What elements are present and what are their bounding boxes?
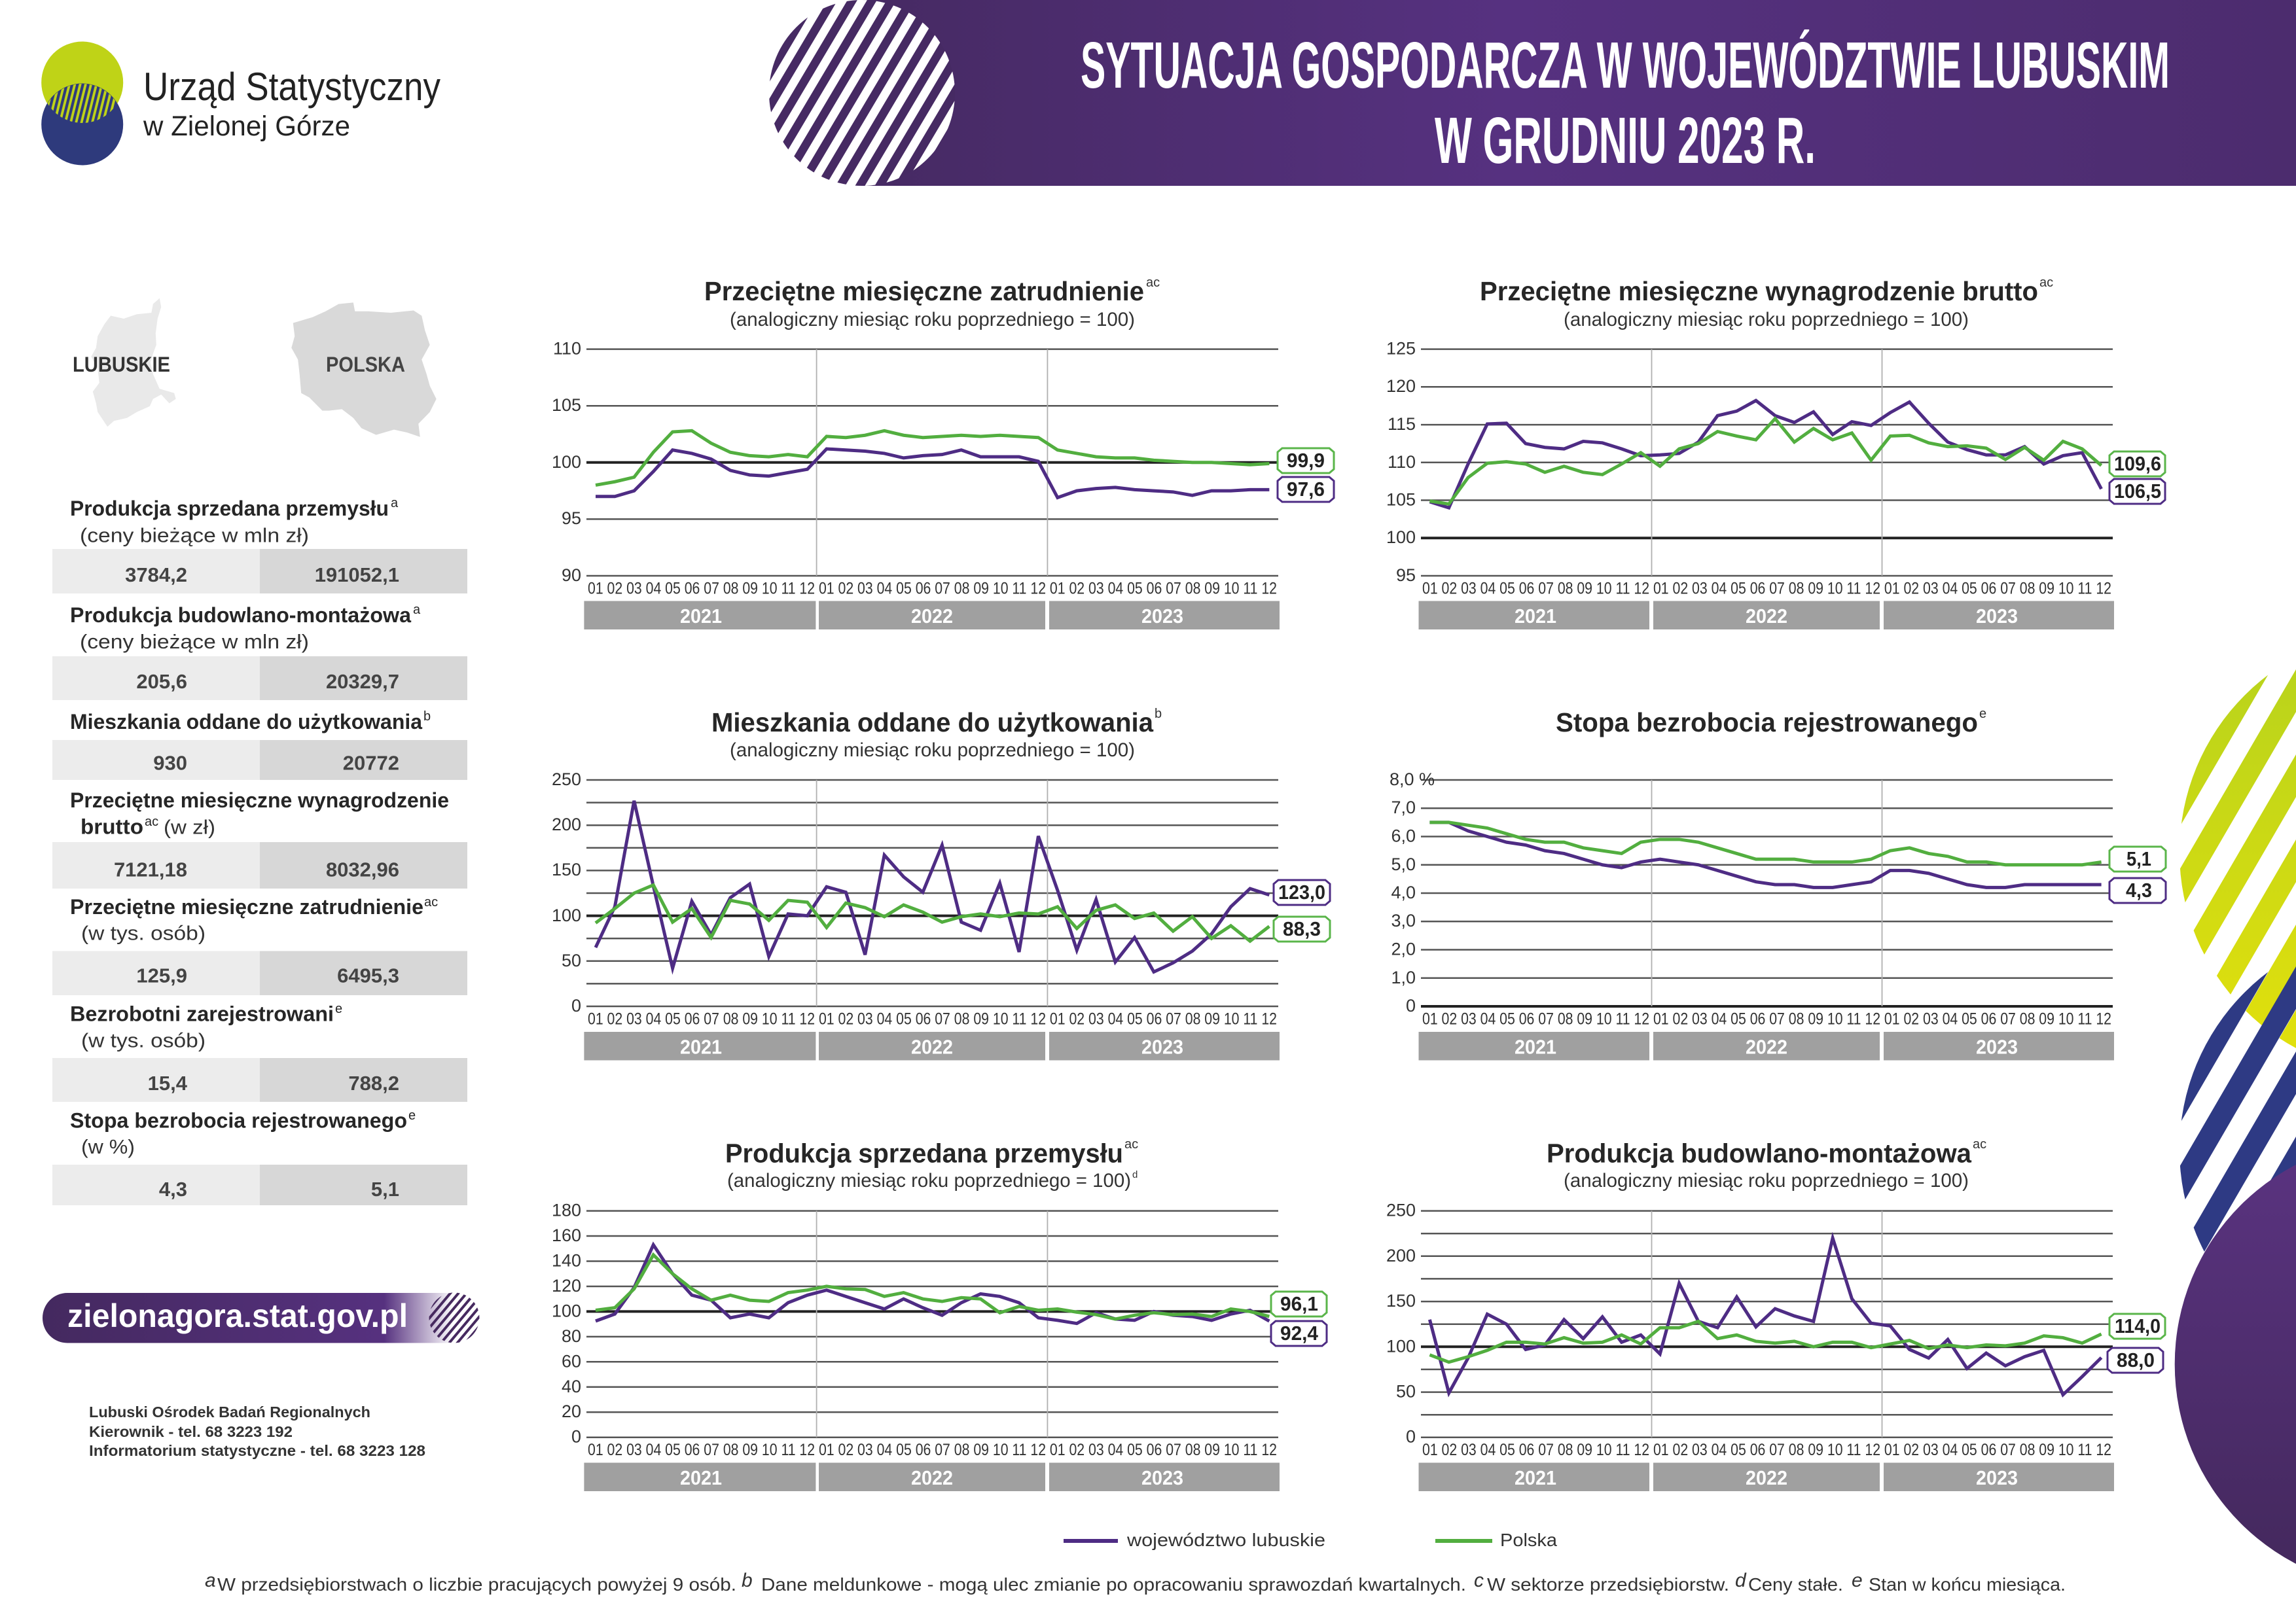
footnotes: Stan w końcu miesiąca. — [1869, 1574, 2066, 1595]
y axis labels: 150 — [552, 860, 581, 879]
year bars: 2022 — [1746, 1466, 1787, 1489]
value label: Polska 5,1: 5,1 — [2126, 847, 2151, 870]
row: produkcja budowlano-montażowa — [52, 603, 467, 700]
value label: Polska 5,1 — [2109, 847, 2166, 872]
panel: chart produkcja budowlano-montażowa — [1386, 1137, 2165, 1491]
banner background — [862, 0, 2296, 186]
footnotes: c — [1474, 1570, 1484, 1591]
y axis labels: 105 — [552, 395, 581, 415]
logo name: Urząd Statystyczny — [143, 65, 440, 109]
chart subtitle: (analogiczny miesiąc roku poprzedniego = 100) — [1564, 1170, 1969, 1192]
year bars — [584, 1032, 1280, 1060]
row: produkcja sprzedana: (ceny bieżące w mln zł) — [80, 523, 309, 547]
icon: lime circle — [41, 42, 123, 123]
label: Polska: POLSKA — [326, 353, 405, 376]
y axis labels: 0 — [1406, 1427, 1416, 1447]
row: produkcja budowlano-montażowa: Produkcja budowlano-montażowa — [70, 603, 411, 627]
row: produkcja sprzedana: 3784,2 — [125, 563, 187, 586]
y axis labels: 0 — [1406, 996, 1416, 1015]
footnotes — [205, 1570, 2066, 1595]
chart subtitle: d — [1132, 1169, 1138, 1180]
row: mieszkania: 930 — [153, 751, 187, 775]
y axis labels: 250 — [1386, 1201, 1416, 1220]
year bars: 2022 — [911, 1035, 953, 1059]
website pill — [43, 1293, 480, 1343]
contact block: Informatorium statystyczne - tel. 68 3223 128 — [89, 1442, 425, 1459]
y axis labels: 115 — [1388, 414, 1416, 434]
line: województwo lubuskie — [1429, 1238, 2102, 1395]
y axis labels: 100 — [552, 1301, 581, 1320]
y axis labels: 8,0 % — [1390, 769, 1435, 789]
line: Polska — [596, 885, 1269, 941]
label: Lubuskie: LUBUSKIE — [73, 353, 170, 376]
y axis labels: 160 — [552, 1226, 581, 1245]
y axis labels: 120 — [1386, 376, 1416, 396]
icon: navy circle — [41, 84, 123, 165]
y axis labels: 80 — [562, 1326, 581, 1346]
row: mieszkania: 20772 — [343, 751, 399, 775]
x axis months: 01 02 03 04 05 06 07 08 09 10 11 12 01 02 03 04 05 06 07 08 09 10 11 12 01 02 03 04 05 06 07 08 09 10 11 12 — [588, 1441, 1277, 1459]
x axis months: 01 02 03 04 05 06 07 08 09 10 11 12 01 02 03 04 05 06 07 08 09 10 11 12 01 02 03 04 05 06 07 08 09 10 11 12 — [588, 580, 1277, 598]
chart title: ac — [2039, 275, 2053, 290]
chart title: Stopa bezrobocia rejestrowanego — [1556, 707, 1978, 737]
value label: Polska 109,6: 109,6 — [2114, 452, 2161, 475]
y axis labels: 95 — [1396, 565, 1416, 585]
row: wynagrodzenie: 8032,96 — [326, 858, 399, 881]
year bars: 2023 — [1141, 1035, 1183, 1059]
year bars: 2021 — [1515, 1466, 1556, 1489]
row: produkcja sprzedana: Produkcja sprzedana przemysłu — [70, 497, 389, 520]
value label: lubuskie 123,0: 123,0 — [1278, 881, 1325, 904]
row: stopa bezrobocia: Stopa bezrobocia rejestrowanego — [70, 1109, 407, 1133]
y axis labels — [552, 339, 581, 585]
value label: Polska 114,0: 114,0 — [2115, 1315, 2161, 1337]
row: zatrudnienie: Przeciętne miesięczne zatrudnienie — [70, 895, 423, 919]
chart title: ac — [1146, 275, 1160, 290]
chart subtitle: (analogiczny miesiąc roku poprzedniego = 100) — [1564, 309, 1969, 330]
y axis labels — [552, 1201, 581, 1447]
y axis labels: 125 — [1386, 339, 1416, 359]
chart title: Produkcja sprzedana przemysłu — [725, 1138, 1123, 1168]
line: Polska — [1429, 419, 2102, 504]
value label: lubuskie 92,4 — [1271, 1321, 1327, 1346]
y axis labels: 2,0 — [1391, 940, 1416, 959]
y axis labels: 6,0 — [1391, 826, 1416, 845]
y axis labels: 200 — [1386, 1246, 1416, 1265]
lime striped circle — [2180, 669, 2296, 1048]
line: województwo lubuskie — [596, 1244, 1269, 1324]
icon: hatched overlap — [47, 84, 115, 123]
y axis labels: 60 — [562, 1351, 581, 1371]
row: produkcja sprzedana: 191052,1 — [315, 563, 399, 586]
row: mieszkania: b — [423, 709, 431, 724]
panel: key figures table — [52, 496, 467, 1205]
year bars — [1419, 1463, 2114, 1491]
value label: lubuskie 97,6: 97,6 — [1287, 478, 1325, 501]
navy striped circle — [2179, 966, 2296, 1252]
year bars: 2023 — [1141, 605, 1183, 627]
chart title: Przeciętne miesięczne wynagrodzenie brutto — [1480, 276, 2038, 306]
x axis months: 01 02 03 04 05 06 07 08 09 10 11 12 01 02 03 04 05 06 07 08 09 10 11 12 01 02 03 04 05 06 07 08 09 10 11 12 — [1422, 580, 2111, 598]
row: wynagrodzenie: Przeciętne miesięczne wynagrodzenie — [70, 788, 449, 812]
line: Polska — [1429, 1321, 2102, 1362]
y axis labels: 180 — [552, 1201, 581, 1220]
pill background — [43, 1293, 480, 1343]
y axis labels: 50 — [562, 951, 581, 970]
value label: Polska 99,9: 99,9 — [1287, 449, 1325, 472]
panel: maps — [73, 298, 437, 437]
contact block: Kierownik - tel. 68 3223 192 — [89, 1423, 293, 1440]
row: stopa bezrobocia: e — [408, 1108, 416, 1123]
y axis labels: 100 — [1386, 1336, 1416, 1356]
row: produkcja sprzedana: a — [391, 496, 399, 510]
line: Polska — [596, 1255, 1269, 1319]
year bars — [584, 601, 1280, 629]
y axis labels — [1390, 769, 1435, 1015]
row: zatrudnienie: (w tys. osób) — [81, 922, 206, 945]
panel: chart wynagrodzenie — [1386, 275, 2165, 629]
value label: lubuskie 97,6 — [1278, 477, 1334, 502]
chart title: e — [1979, 707, 1986, 721]
value label: lubuskie 88,0 — [2108, 1348, 2163, 1373]
year bars: 2022 — [1746, 605, 1787, 627]
row: bezrobotni: 15,4 — [148, 1072, 188, 1095]
legend text: lubuskie: województwo lubuskie — [1126, 1530, 1325, 1550]
y axis labels: 0 — [571, 1427, 581, 1447]
value label: Polska 96,1: 96,1 — [1280, 1292, 1318, 1315]
year bars: 2023 — [1141, 1466, 1183, 1489]
chart title: Produkcja budowlano-montażowa — [1547, 1138, 1972, 1168]
x axis months: 01 02 03 04 05 06 07 08 09 10 11 12 01 02 03 04 05 06 07 08 09 10 11 12 01 02 03 04 05 06 07 08 09 10 11 12 — [1422, 1010, 2111, 1029]
row: bezrobotni — [52, 1002, 467, 1102]
icon: map of Lubuskie — [91, 298, 176, 427]
row: wynagrodzenie: (w zł) — [164, 815, 215, 838]
value label: lubuskie 88,0: 88,0 — [2117, 1349, 2155, 1371]
row: zatrudnienie — [52, 895, 467, 995]
row: wynagrodzenie: brutto — [81, 815, 143, 838]
row: stopa bezrobocia — [52, 1108, 467, 1205]
row: zatrudnienie: 6495,3 — [337, 964, 399, 987]
value label: lubuskie 4,3 — [2109, 878, 2166, 903]
row: mieszkania — [52, 709, 467, 780]
contact block — [89, 1403, 425, 1459]
icon: map of Poland — [291, 302, 437, 437]
purple circle — [2175, 1139, 2296, 1589]
line: województwo lubuskie — [1429, 822, 2102, 887]
legend swatch: lubuskie — [1064, 1539, 1118, 1543]
legend swatch: Polska — [1435, 1539, 1492, 1543]
year bars — [1419, 601, 2114, 629]
year bars: 2022 — [911, 605, 953, 627]
footnotes: b — [742, 1570, 753, 1591]
chart subtitle: (analogiczny miesiąc roku poprzedniego = 100) — [730, 309, 1135, 330]
footnotes: a — [205, 1570, 216, 1591]
y axis labels: 7,0 — [1391, 798, 1416, 817]
icon: striped circle — [769, 0, 955, 186]
row: stopa bezrobocia: 5,1 — [371, 1178, 399, 1201]
footnotes: W sektorze przedsiębiorstw. — [1487, 1574, 1729, 1595]
footnotes: e — [1852, 1570, 1863, 1591]
row: wynagrodzenie — [52, 788, 467, 889]
row: produkcja sprzedana — [52, 496, 467, 593]
y axis labels: 1,0 — [1391, 968, 1416, 987]
row: bezrobotni: (w tys. osób) — [81, 1029, 206, 1051]
panel: chart mieszkania — [552, 707, 1330, 1060]
year bars: 2022 — [1746, 1035, 1787, 1059]
chart title: ac — [1124, 1137, 1138, 1152]
year bars: 2021 — [1515, 1035, 1556, 1059]
row: produkcja budowlano-montażowa: 20329,7 — [326, 670, 399, 693]
chart subtitle: (analogiczny miesiąc roku poprzedniego = 100) — [727, 1170, 1131, 1192]
row: bezrobotni: Bezrobotni zarejestrowani — [70, 1002, 334, 1026]
year bars: 2021 — [680, 1035, 722, 1059]
y axis labels: 50 — [1396, 1382, 1416, 1402]
y axis labels: 140 — [552, 1251, 581, 1271]
y axis labels: 100 — [1386, 527, 1416, 547]
line: województwo lubuskie — [596, 449, 1269, 497]
line: Polska — [596, 431, 1269, 485]
y axis labels: 250 — [552, 769, 581, 789]
y axis labels — [552, 769, 581, 1015]
year bars: 2021 — [1515, 605, 1556, 627]
website address: zielonagora.stat.gov.pl — [67, 1297, 408, 1334]
row: zatrudnienie: 125,9 — [136, 964, 187, 987]
y axis labels: 120 — [552, 1276, 581, 1296]
panel: chart zatrudnienie — [552, 275, 1334, 629]
year bars: 2023 — [1976, 1466, 2018, 1489]
line: Polska — [1429, 822, 2102, 865]
footnotes: W przedsiębiorstwach o liczbie pracujących powyżej 9 osób. — [217, 1574, 736, 1595]
row: produkcja budowlano-montażowa: 205,6 — [136, 670, 187, 693]
footnotes: Dane meldunkowe - mogą ulec zmianie po opracowaniu sprawozdań kwartalnych. — [761, 1574, 1466, 1595]
y axis labels: 90 — [562, 565, 581, 585]
value label: lubuskie 92,4: 92,4 — [1280, 1322, 1319, 1345]
year bars: 2021 — [680, 605, 722, 627]
year bars: 2022 — [911, 1466, 953, 1489]
value label: Polska 96,1 — [1271, 1292, 1327, 1316]
legend text: Polska: Polska — [1500, 1530, 1557, 1550]
value label: lubuskie 106,5: 106,5 — [2114, 480, 2161, 503]
year bars: 2023 — [1976, 1035, 2018, 1059]
value label: Polska 88,3: 88,3 — [1283, 917, 1321, 940]
y axis labels: 200 — [552, 815, 581, 834]
y axis labels: 40 — [562, 1377, 581, 1396]
year bars: 2021 — [680, 1466, 722, 1489]
legend — [1064, 1530, 1557, 1550]
y axis labels: 105 — [1386, 489, 1416, 509]
header banner — [769, 0, 2296, 186]
chart title: Przeciętne miesięczne zatrudnienie — [704, 276, 1144, 306]
year bars: 2023 — [1976, 605, 2018, 627]
chart title: ac — [1973, 1137, 1986, 1152]
chart title: Mieszkania oddane do użytkowania — [711, 707, 1154, 737]
row: produkcja budowlano-montażowa: a — [413, 603, 421, 617]
contact block: Lubuski Ośrodek Badań Regionalnych — [89, 1403, 370, 1421]
logo city: w Zielonej Górze — [143, 111, 350, 142]
y axis labels: 3,0 — [1391, 911, 1416, 930]
line: województwo lubuskie — [596, 801, 1269, 972]
row: stopa bezrobocia: 4,3 — [159, 1178, 187, 1201]
y axis labels: 110 — [553, 339, 581, 359]
panel: chart produkcja sprzedana — [552, 1137, 1327, 1491]
main title line 2: W GRUDNIU 2023 R. — [1435, 104, 1816, 177]
logo: Urząd Statystyczny — [41, 42, 440, 165]
value label: Polska 99,9 — [1278, 448, 1334, 473]
y axis labels: 4,0 — [1391, 883, 1416, 902]
y axis labels — [1386, 1201, 1416, 1447]
chart title: b — [1155, 707, 1162, 721]
y axis labels: 150 — [1386, 1291, 1416, 1311]
y axis labels: 100 — [552, 452, 581, 472]
y axis labels: 20 — [562, 1402, 581, 1421]
y axis labels: 0 — [571, 996, 581, 1015]
x axis months: 01 02 03 04 05 06 07 08 09 10 11 12 01 02 03 04 05 06 07 08 09 10 11 12 01 02 03 04 05 06 07 08 09 10 11 12 — [588, 1010, 1277, 1029]
row: bezrobotni: e — [335, 1002, 342, 1016]
panel: chart stopa bezrobocia — [1390, 707, 2166, 1060]
row: bezrobotni: 788,2 — [348, 1072, 399, 1095]
line: województwo lubuskie — [1429, 400, 2102, 508]
footnotes: d — [1735, 1570, 1747, 1591]
footnotes: Ceny stałe. — [1748, 1574, 1843, 1595]
row: wynagrodzenie: 7121,18 — [114, 858, 187, 881]
row: zatrudnienie: ac — [424, 895, 438, 909]
chart subtitle: (analogiczny miesiąc roku poprzedniego = 100) — [730, 739, 1135, 761]
row: mieszkania: Mieszkania oddane do użytkowania — [70, 710, 422, 733]
year bars — [584, 1463, 1280, 1491]
y axis labels: 5,0 — [1391, 855, 1416, 874]
y axis labels: 110 — [1388, 452, 1416, 472]
x axis months: 01 02 03 04 05 06 07 08 09 10 11 12 01 02 03 04 05 06 07 08 09 10 11 12 01 02 03 04 05 06 07 08 09 10 11 12 — [1422, 1441, 2111, 1459]
icon: hatched circle — [429, 1293, 479, 1343]
year bars — [1419, 1032, 2114, 1060]
y axis labels — [1386, 339, 1416, 585]
row: wynagrodzenie: ac — [145, 815, 158, 829]
value label: Polska 88,3 — [1274, 917, 1330, 942]
decoration: right side striped circles — [2174, 669, 2296, 1564]
row: produkcja budowlano-montażowa: (ceny bieżące w mln zł) — [80, 630, 309, 653]
y axis labels: 100 — [552, 906, 581, 925]
y axis labels: 95 — [562, 508, 581, 528]
row: stopa bezrobocia: (w %) — [81, 1135, 135, 1158]
value label: lubuskie 4,3: 4,3 — [2126, 879, 2152, 902]
